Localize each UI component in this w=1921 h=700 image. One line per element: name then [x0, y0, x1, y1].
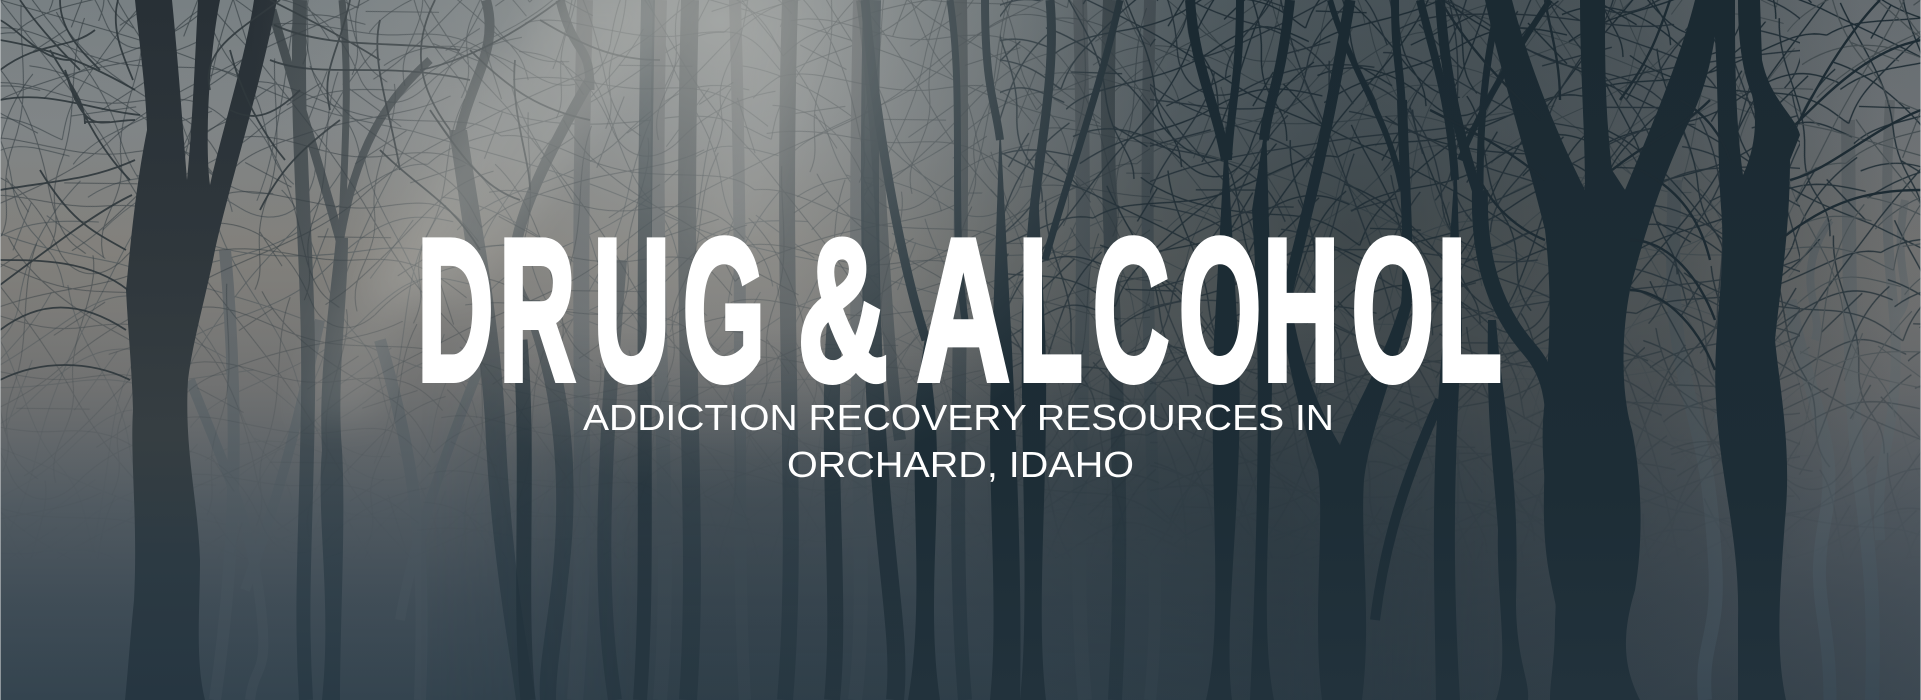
- title: DRUG & ALCOHOL: LCOHOL: [1018, 197, 1502, 424]
- lower central darkness: [506, 370, 1318, 676]
- subtitle line 1: ADDICTION RECOVERY RESOURCES IN: [583, 397, 1334, 438]
- subtitle: [583, 397, 1334, 485]
- right crown branches: [1430, 0, 1921, 370]
- dark twigs on right: [1000, 0, 1921, 478]
- left crown branches: [0, 0, 140, 380]
- dark central haze: [700, 0, 1921, 700]
- frame edge highlights: [0, 0, 1, 700]
- title: DRUG & ALCOHOL: DRUG: [417, 197, 765, 424]
- foreground central trunks: [520, 0, 1569, 700]
- middle tree trunks: [272, 0, 1119, 700]
- title: DRUG & ALCOHOL: &: [797, 196, 888, 423]
- fine twigs, near grey layer: [0, 0, 1150, 434]
- foreground left trees: [0, 0, 660, 700]
- foreground right trees: [1430, 0, 1921, 700]
- subtitle line 2: ORCHARD, IDAHO: [787, 444, 1134, 485]
- sun rays through fog: [150, 0, 1300, 520]
- title: DRUG & ALCOHOL: A: [916, 198, 1010, 424]
- title: DRUG & ALCOHOL: [417, 196, 1502, 424]
- fine bare twigs, far layer: [0, 0, 1920, 420]
